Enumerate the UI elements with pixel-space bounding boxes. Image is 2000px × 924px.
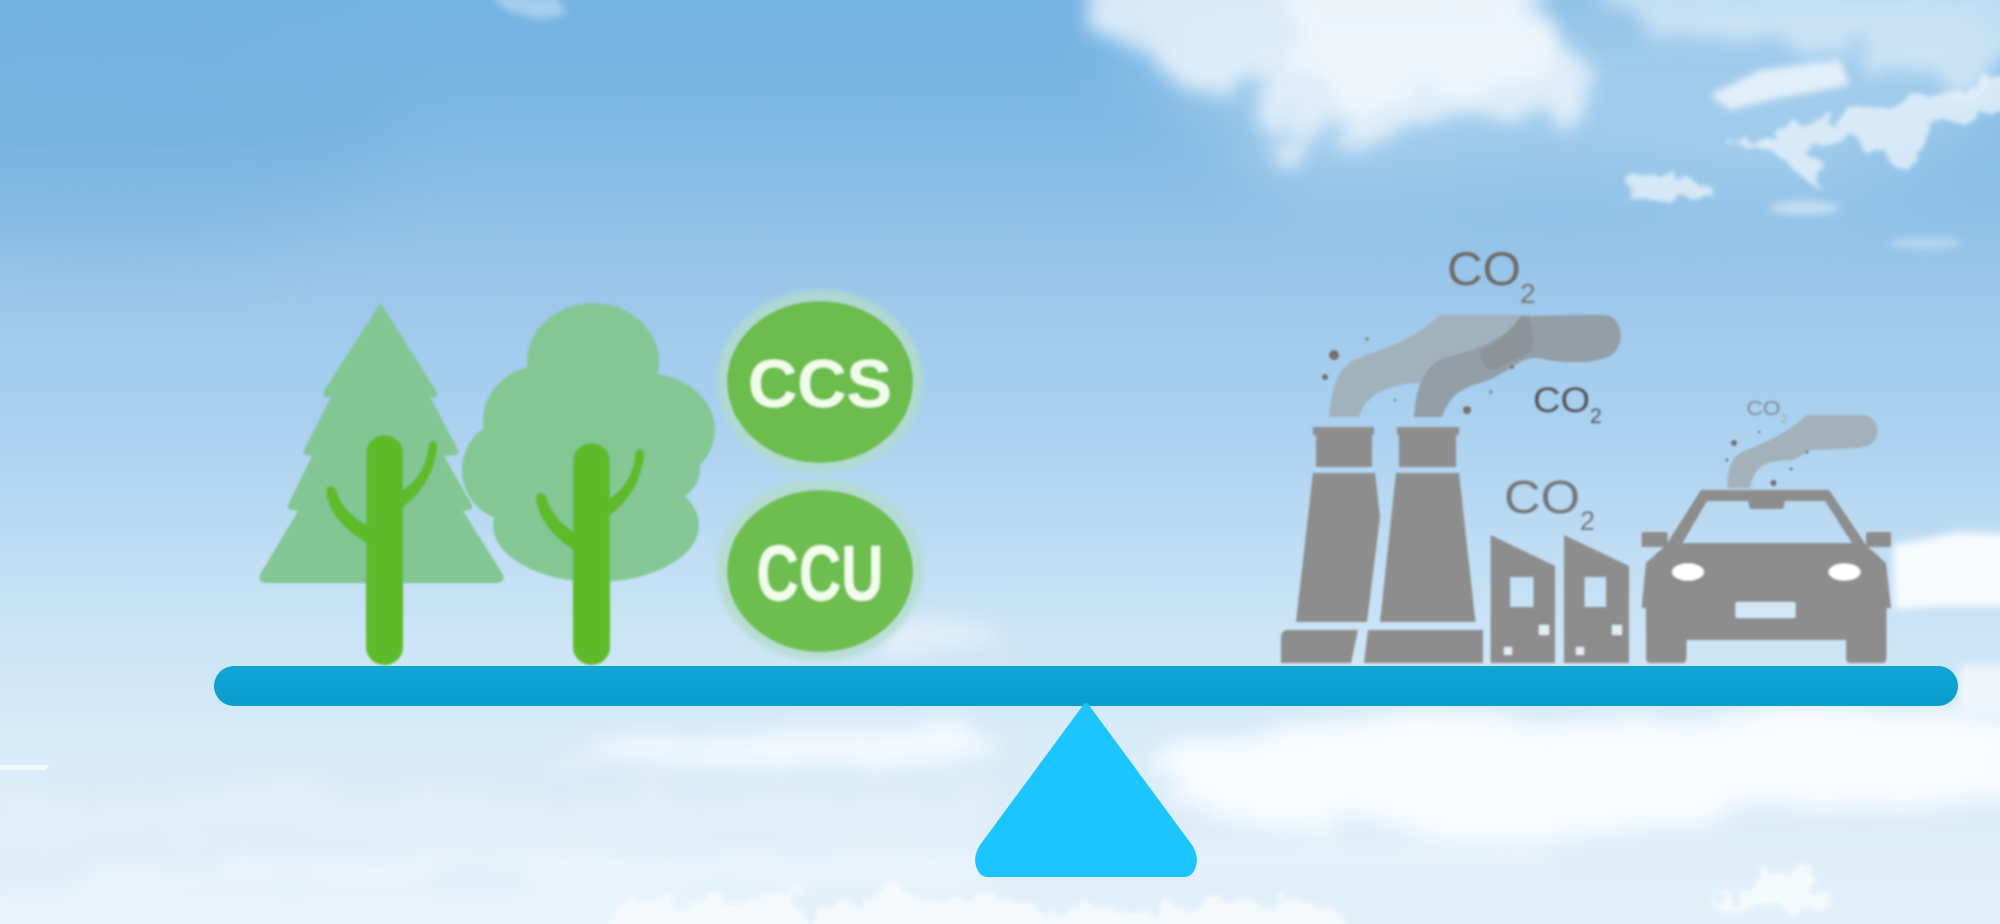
badge: CCS [717,290,923,472]
label: CO2 middle: 2 [1590,405,1602,428]
label: CO2 top: CO [1447,242,1521,295]
label: CO2 car: 2 [1781,412,1788,426]
icon: conifer tree [260,303,503,665]
label: CO2 middle: CO [1533,381,1590,420]
label: CO2 lower: 2 [1580,506,1595,536]
smoke: car exhaust [1727,415,1878,488]
balance fulcrum triangle [975,703,1197,877]
badge: CCS: CCS [748,346,892,422]
clouds top right [490,0,2000,249]
smoke: factory plumes [1329,315,1621,417]
emissions group [1281,242,1891,663]
icon: car [1642,490,1891,663]
label: CO2 car: CO [1746,398,1780,420]
label: CO2 lower: CO [1504,471,1580,523]
icon: factory chimneys [1281,427,1483,663]
icon: factory buildings [1491,535,1629,663]
particles: factory soot [1322,338,1514,414]
label: CO2 top: 2 [1520,278,1536,309]
badge: CCU: CCU [756,528,884,617]
icon: round tree [462,303,715,665]
clouds lower [0,532,2000,924]
particles: car soot [1726,431,1808,486]
badge: CCU [717,479,923,661]
balance beam [214,666,1958,706]
trees group [260,290,923,665]
